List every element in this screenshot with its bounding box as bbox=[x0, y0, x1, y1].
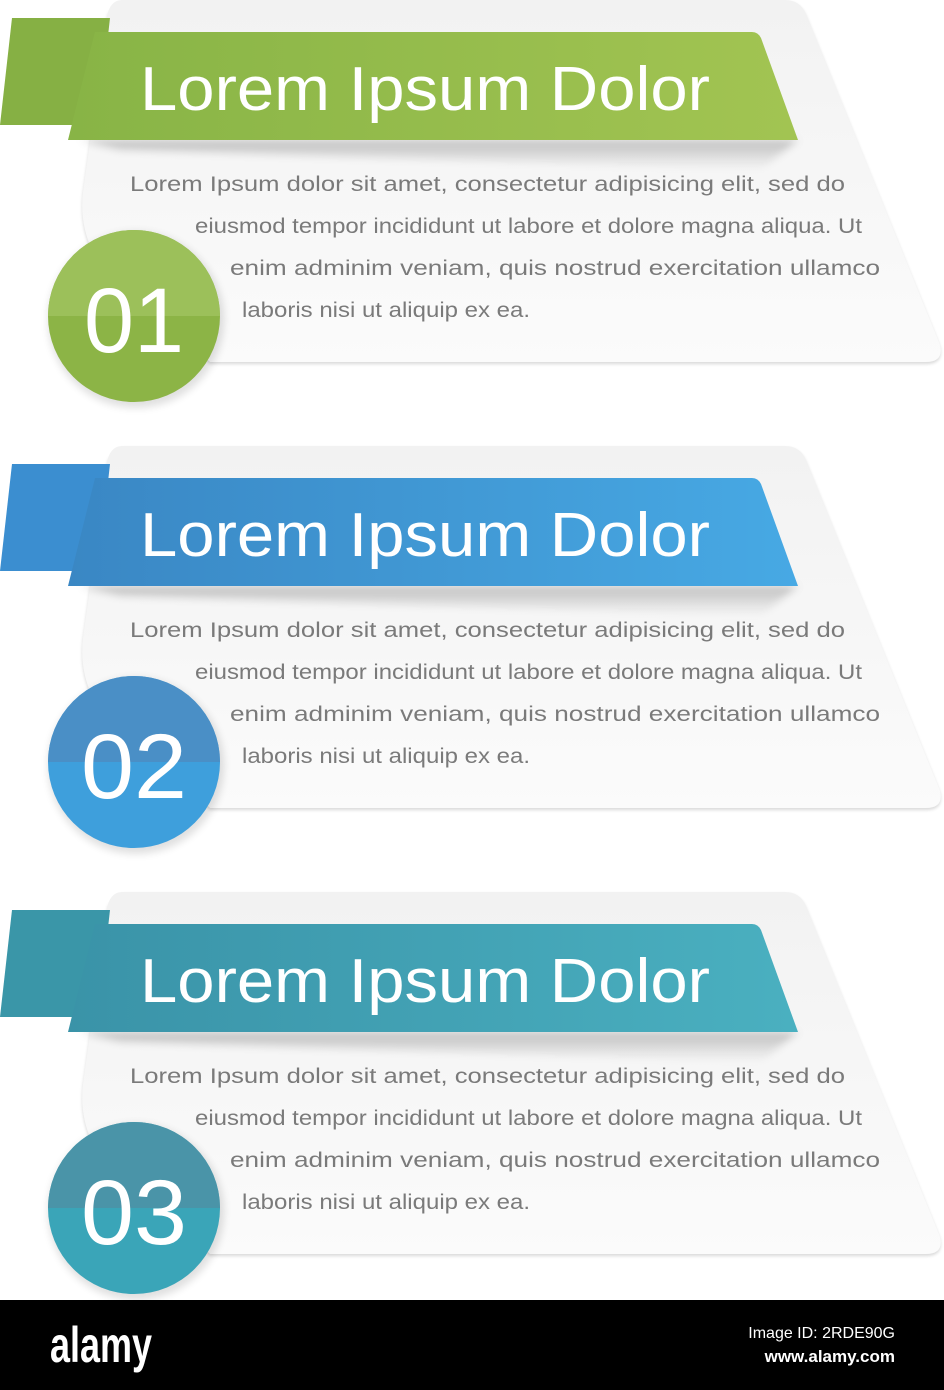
footer bar bbox=[0, 1300, 944, 1390]
panel: card 1 bbox=[82, 0, 941, 364]
body text: enim adminim veniam, quis nostrud exercitation ullamco bbox=[230, 703, 880, 726]
body text: eiusmod tempor incididunt ut labore et dolore magna aliqua. Ut bbox=[195, 1107, 862, 1130]
body text: eiusmod tempor incididunt ut labore et dolore magna aliqua. Ut bbox=[195, 661, 862, 684]
footer url: www.alamy.com bbox=[764, 1347, 895, 1366]
body text: Lorem Ipsum dolor sit amet, consectetur adipisicing elit, sed do bbox=[130, 173, 845, 196]
footer logo: alamy bbox=[50, 1317, 152, 1373]
ribbon shadow bbox=[80, 140, 798, 170]
body text: laboris nisi ut aliquip ex ea. bbox=[242, 299, 530, 322]
body text: enim adminim veniam, quis nostrud exercitation ullamco bbox=[230, 257, 880, 280]
number badge 03 bbox=[48, 1122, 224, 1300]
panel: card 3 bbox=[82, 892, 941, 1256]
number badge 02 bbox=[48, 676, 224, 854]
ribbon banner bbox=[68, 32, 798, 140]
body text: laboris nisi ut aliquip ex ea. bbox=[242, 745, 530, 768]
ribbon fold tab bbox=[0, 18, 110, 125]
number badge 01 bbox=[48, 230, 224, 408]
body text bbox=[130, 173, 880, 322]
body text: eiusmod tempor incididunt ut labore et dolore magna aliqua. Ut bbox=[195, 215, 862, 238]
section 2 bbox=[0, 446, 941, 854]
ribbon shadow bbox=[80, 586, 798, 616]
ribbon banner bbox=[68, 924, 798, 1032]
body text: Lorem Ipsum dolor sit amet, consectetur adipisicing elit, sed do bbox=[130, 619, 845, 642]
body text bbox=[130, 619, 880, 768]
ribbon fold tab bbox=[0, 464, 110, 571]
body text: Lorem Ipsum dolor sit amet, consectetur adipisicing elit, sed do bbox=[130, 1065, 845, 1088]
body text: laboris nisi ut aliquip ex ea. bbox=[242, 1191, 530, 1214]
title: Lorem Ipsum Dolor bbox=[140, 501, 710, 570]
title: Lorem Ipsum Dolor bbox=[140, 947, 710, 1016]
section 3 bbox=[0, 892, 941, 1300]
number badge 02: 02 bbox=[81, 716, 187, 818]
number badge 03: 03 bbox=[81, 1162, 187, 1264]
title: Lorem Ipsum Dolor bbox=[140, 55, 710, 124]
ribbon fold tab bbox=[0, 910, 110, 1017]
number badge 01: 01 bbox=[84, 270, 184, 372]
ribbon banner bbox=[68, 478, 798, 586]
body text: enim adminim veniam, quis nostrud exercitation ullamco bbox=[230, 1149, 880, 1172]
panel: card 2 bbox=[82, 446, 941, 810]
section 1 bbox=[0, 0, 941, 408]
body text bbox=[130, 1065, 880, 1214]
ribbon shadow bbox=[80, 1032, 798, 1062]
footer image id: Image ID: 2RDE90G bbox=[748, 1325, 895, 1342]
